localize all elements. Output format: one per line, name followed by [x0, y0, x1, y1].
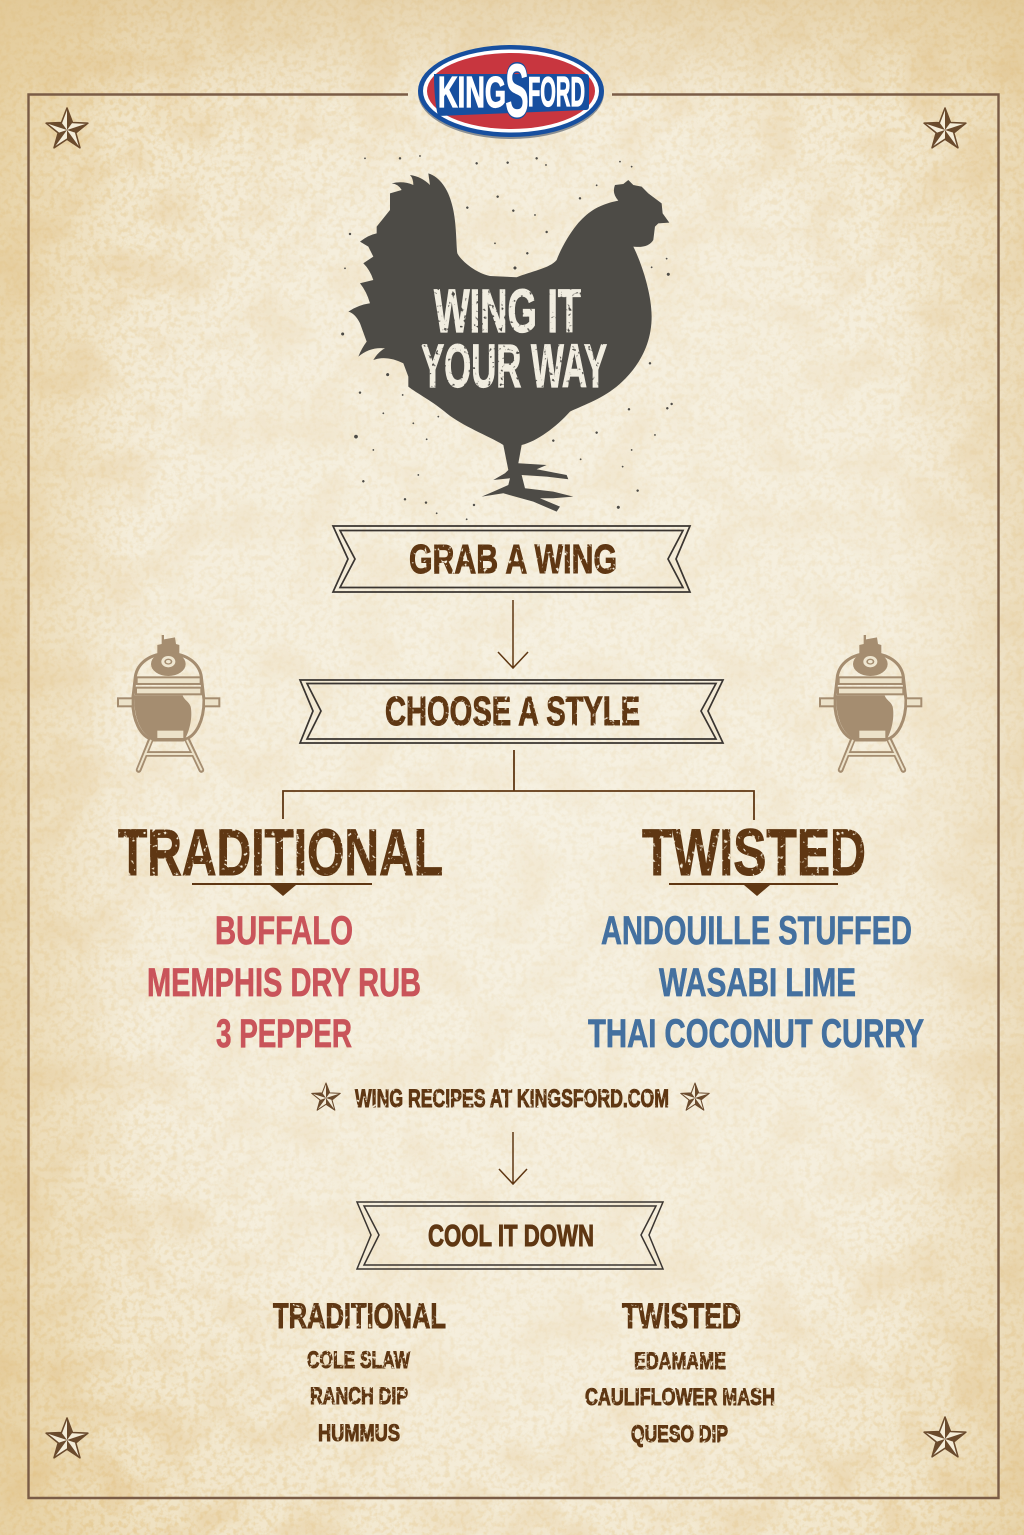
logo: Kingsford: [418, 45, 604, 139]
side: ranch dip: RANCH DIP: [310, 1383, 408, 1410]
item: wasabi lime: WASABI LIME: [659, 961, 856, 1005]
underline marker: [192, 883, 372, 896]
arrow: to choose a style: [498, 600, 528, 668]
star: bottom left: [46, 1418, 88, 1458]
side: cauliflower mash: CAULIFLOWER MASH: [585, 1384, 775, 1411]
heading: traditional sides: TRADITIONAL: [273, 1297, 446, 1336]
banner: choose a style: CHOOSE A STYLE: [385, 688, 640, 734]
grill icon: left: [118, 635, 219, 770]
item: buffalo: BUFFALO: [215, 909, 353, 953]
item: memphis dry rub: MEMPHIS DRY RUB: [147, 961, 421, 1005]
logo: Kingsford: S: [505, 49, 529, 134]
side: edamame: EDAMAME: [634, 1348, 726, 1375]
recipes line with stars: WING RECIPES AT KINGSFORD.COM: [355, 1085, 669, 1113]
side: cole slaw: COLE SLAW: [307, 1347, 410, 1374]
star: bottom right: [924, 1417, 966, 1457]
logo: Kingsford: FORD: [528, 68, 585, 115]
connector: style branches: [283, 750, 754, 820]
banner: choose a style: [300, 680, 723, 743]
paint splatter around rooster: [341, 155, 673, 520]
arrow: to cool it down: [499, 1132, 527, 1184]
banner: grab a wing: [333, 526, 690, 592]
banner: cool it down: COOL IT DOWN: [428, 1218, 594, 1253]
star: top right: [924, 108, 966, 148]
heading: your way: YOUR WAY: [421, 332, 607, 400]
star: top left: [46, 108, 88, 148]
grill icon: right: [820, 635, 921, 770]
rooster silhouette with title: [348, 173, 669, 512]
column: twisted: [588, 815, 924, 1056]
item: andouille stuffed: ANDOUILLE STUFFED: [601, 909, 912, 953]
side: queso dip: QUESO DIP: [631, 1421, 728, 1448]
banner: cool it down: [357, 1202, 663, 1269]
sides: traditional: [273, 1297, 446, 1447]
underline marker: [669, 883, 838, 896]
banner: grab a wing: GRAB A WING: [409, 536, 617, 582]
heading: twisted sides: TWISTED: [622, 1297, 741, 1336]
item: 3 pepper: 3 PEPPER: [216, 1012, 352, 1056]
recipes line with stars: [312, 1083, 709, 1113]
side: hummus: HUMMUS: [318, 1420, 400, 1447]
sides: twisted: [585, 1297, 775, 1448]
heading: traditional: TRADITIONAL: [118, 815, 443, 889]
heading: twisted: TWISTED: [642, 815, 866, 889]
column: traditional: [118, 815, 443, 1056]
heading: wing it: WING IT: [434, 277, 581, 345]
logo: Kingsford: KING: [438, 68, 506, 117]
